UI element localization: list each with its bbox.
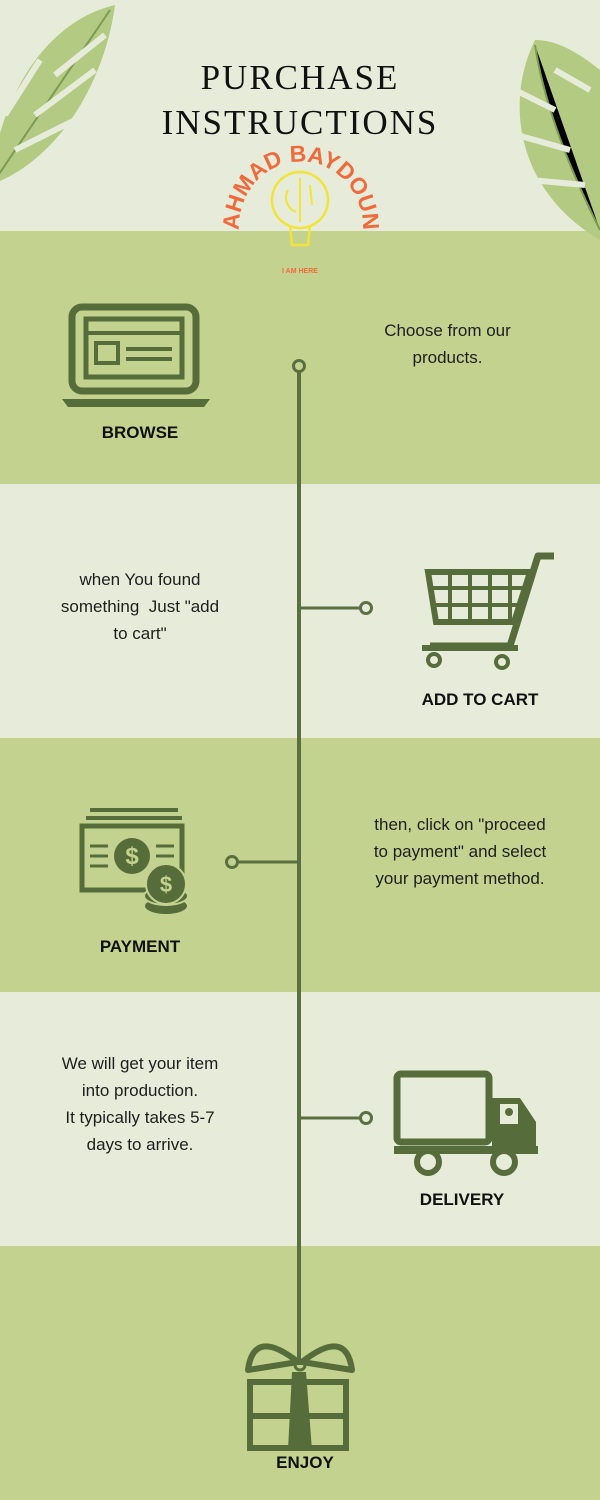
icon: money: $ <box>160 872 172 897</box>
text: then, click on "proceed <box>374 815 546 834</box>
label: BROWSE <box>102 423 178 442</box>
text: something Just "add <box>61 597 219 616</box>
timeline line <box>297 365 301 1365</box>
title: INSTRUCTIONS <box>162 103 438 142</box>
icon: laptop <box>62 304 210 407</box>
icon: truck <box>394 1070 538 1176</box>
text: It typically takes 5-7 <box>65 1108 215 1127</box>
decorative leaf: top right <box>520 40 600 240</box>
icon: money <box>80 808 187 914</box>
logo: Ahmad Baydoun bulb <box>223 146 380 275</box>
title: PURCHASE <box>201 58 399 97</box>
connector node <box>292 359 306 373</box>
text: days to arrive. <box>87 1135 193 1154</box>
text: We will get your item <box>62 1054 218 1073</box>
text <box>62 1054 218 1154</box>
connector <box>301 601 373 615</box>
step: add to cart <box>61 552 554 709</box>
connector <box>301 1111 373 1125</box>
text: your payment method. <box>375 869 545 888</box>
label: PAYMENT <box>100 937 180 956</box>
text: to cart" <box>113 624 167 643</box>
text <box>61 570 219 643</box>
step: payment <box>80 808 546 956</box>
text: to payment" and select <box>374 842 546 861</box>
logo: Ahmad Baydoun bulb: I AM HERE <box>282 268 318 275</box>
icon: cart <box>422 552 554 670</box>
text <box>384 321 511 367</box>
step: delivery <box>62 1054 538 1209</box>
text: products. <box>413 348 482 367</box>
text: when You found <box>79 570 200 589</box>
text: Choose from our <box>384 321 511 340</box>
text: into production. <box>82 1081 198 1100</box>
step: enjoy gift <box>245 1343 355 1472</box>
label: DELIVERY <box>420 1190 504 1209</box>
logo: Ahmad Baydoun bulb: AHMAD BAYDOUN <box>223 146 380 230</box>
connector <box>225 855 297 869</box>
label: ENJOY <box>276 1453 334 1472</box>
step: browse <box>62 304 511 442</box>
icon: gift <box>245 1343 355 1451</box>
label: ADD TO CART <box>422 690 538 709</box>
icon: money: $ <box>125 843 139 870</box>
decorative leaf: top left <box>0 5 115 181</box>
title <box>162 58 438 142</box>
text <box>374 815 546 888</box>
